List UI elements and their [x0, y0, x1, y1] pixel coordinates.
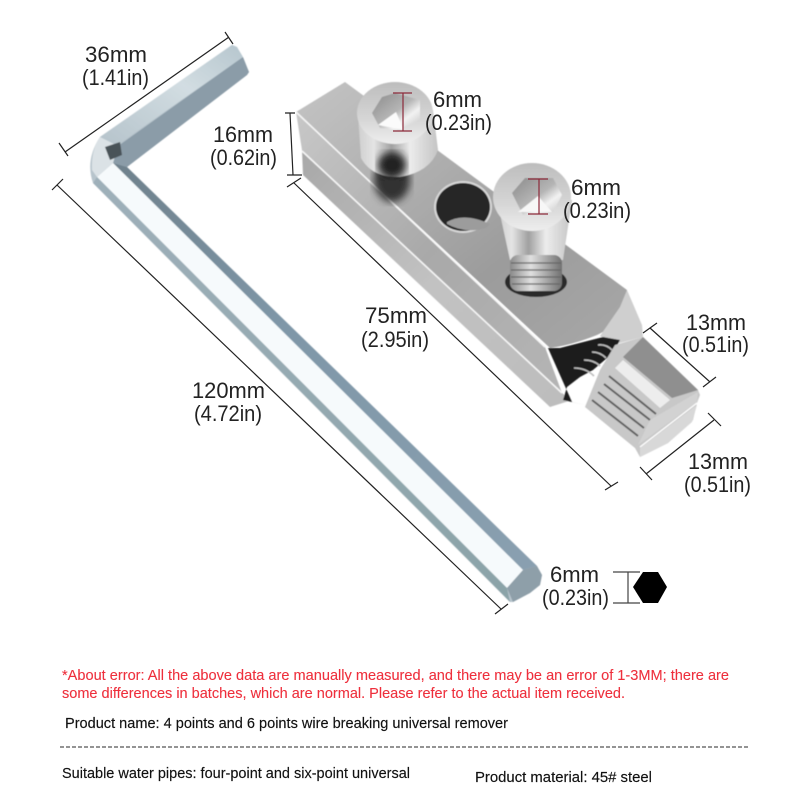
label: hex 6mm: 6mm	[550, 562, 599, 587]
label: upper 13mm: (0.51in)	[682, 332, 749, 357]
label: second bolt 6mm: (0.23in)	[563, 198, 631, 223]
label: lower 13mm: 13mm	[688, 449, 748, 474]
label: 16mm: (0.62in)	[210, 145, 277, 170]
label: second bolt 6mm	[563, 175, 631, 223]
error note	[62, 667, 729, 702]
remover block	[296, 82, 700, 457]
bolt one	[357, 82, 438, 202]
label: bolt 6mm: 6mm	[433, 87, 482, 112]
dimension: 75mm line	[287, 178, 618, 490]
label: 16mm: 16mm	[213, 122, 273, 147]
bolt two	[493, 163, 572, 297]
knurled tip	[574, 337, 700, 457]
product material: Product material: 45# steel	[475, 769, 652, 786]
label: 75mm: 75mm	[365, 303, 427, 328]
label: lower 13mm: (0.51in)	[684, 472, 751, 497]
label: upper 13mm	[682, 310, 749, 357]
label: 120mm: (4.72in)	[194, 401, 262, 426]
block side face	[296, 112, 562, 393]
label: hex 6mm: (0.23in)	[542, 585, 609, 610]
hex key wrench	[90, 45, 542, 602]
label: 36mm: 36mm	[85, 42, 147, 67]
dimension: bolt marks	[393, 93, 548, 214]
icon: hexagon cross-section	[633, 572, 667, 603]
label: hex 6mm	[542, 562, 609, 610]
label: upper 13mm: 13mm	[686, 310, 746, 335]
label: 120mm: 120mm	[192, 378, 265, 403]
dimension: tip 13mm lower line	[640, 413, 721, 480]
thread	[574, 345, 612, 376]
suitable water pipes: Suitable water pipes: four-point and six-point universal	[62, 765, 410, 782]
dimension: tip 13mm upper line	[643, 323, 716, 387]
dimension: hex bracket	[613, 572, 640, 603]
error note: *About error: All the above data are manually measured, and there may be an error of 1-3MM; there are	[62, 667, 729, 684]
hole	[434, 181, 492, 233]
label: bolt 6mm	[425, 87, 492, 135]
label: bolt 6mm: (0.23in)	[425, 110, 492, 135]
label: 75mm	[361, 303, 429, 352]
thread shadow	[548, 337, 620, 405]
dimension: 16mm line	[285, 113, 302, 175]
label: 75mm: (2.95in)	[361, 327, 429, 352]
label: 36mm	[82, 42, 149, 90]
block top face	[296, 82, 627, 348]
end chamfer	[600, 290, 643, 345]
label: 120mm	[192, 378, 265, 426]
product name: Product name: 4 points and 6 points wire breaking universal remover	[65, 715, 508, 732]
label: lower 13mm	[684, 449, 751, 497]
error note: some differences in batches, which are normal. Please refer to the actual item received.	[62, 685, 625, 702]
dimension: 120mm line	[52, 179, 508, 614]
label: 36mm: (1.41in)	[82, 65, 149, 90]
dimension: 36mm line	[59, 32, 233, 156]
label: second bolt 6mm: 6mm	[571, 175, 621, 200]
label: 16mm	[210, 122, 277, 170]
